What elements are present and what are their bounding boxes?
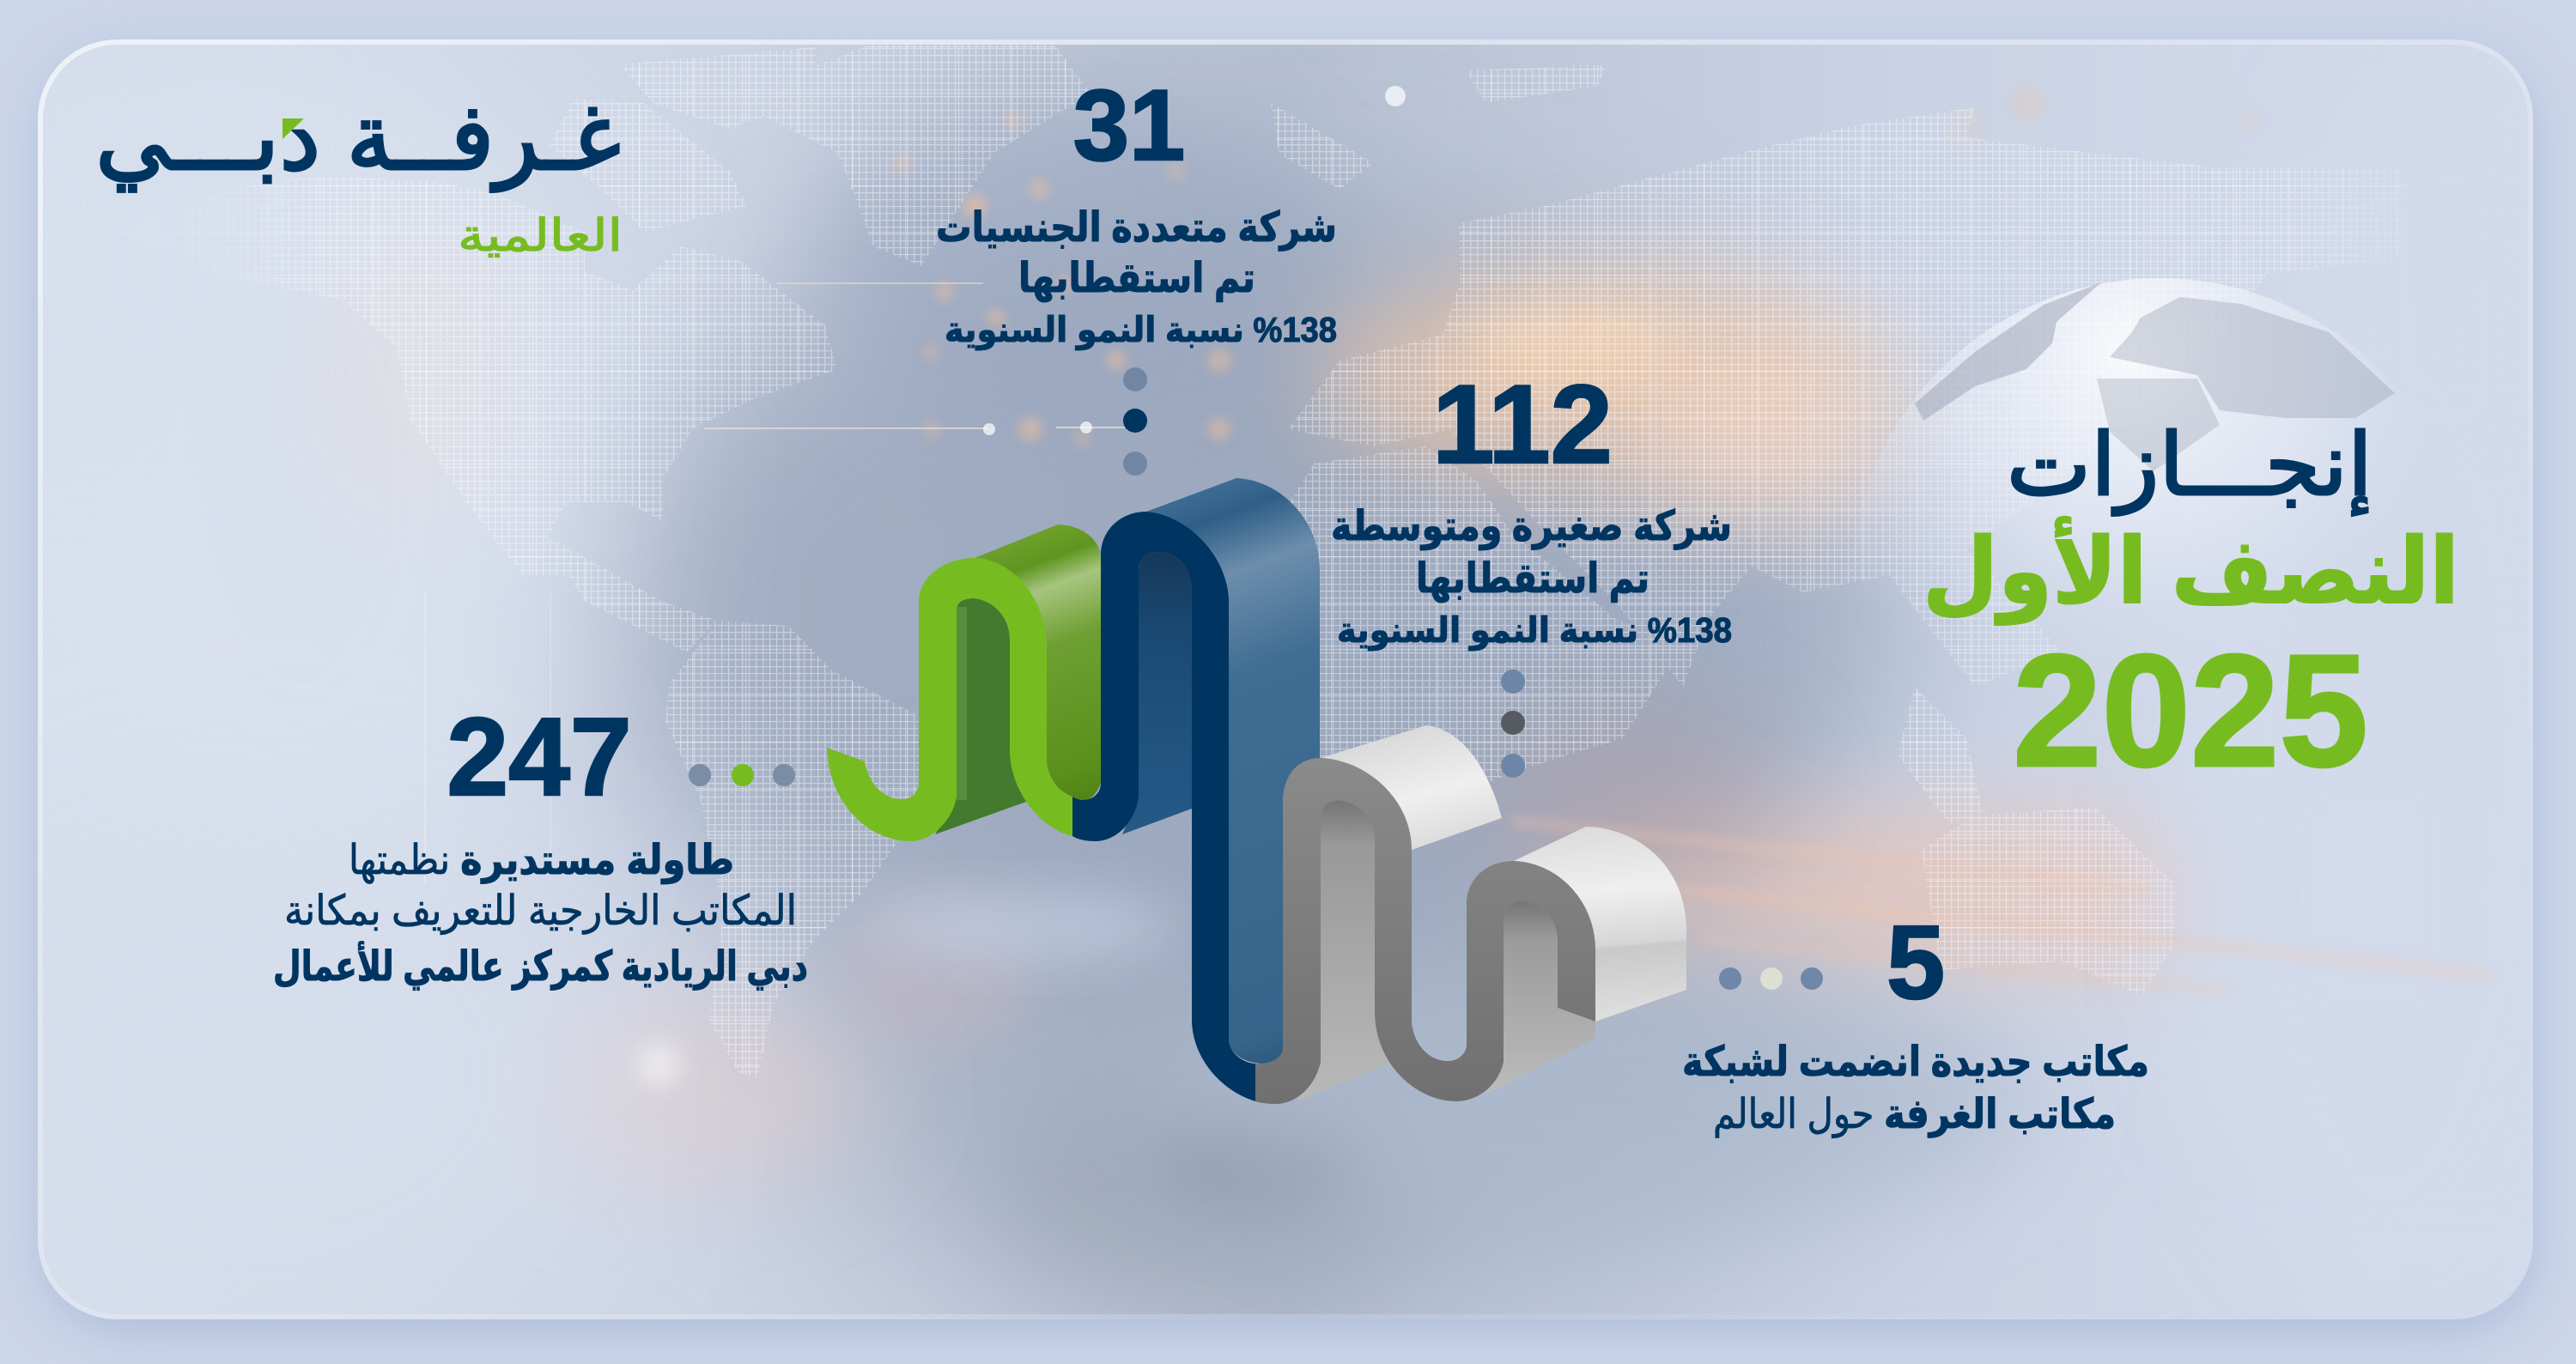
stat: 112 SMEs: تم استقطابها [1416, 556, 1649, 603]
stat: 247 round tables: المكاتب الخارجية للتعريف بمكانة [284, 888, 797, 935]
stat: 247 round tables [273, 695, 808, 991]
title [1923, 417, 2459, 800]
3D ribbon chart [827, 478, 1686, 1104]
dots connector: 112 [1501, 670, 1525, 778]
stat: 31 multinational companies: شركة متعددة الجنسيات [936, 205, 1337, 252]
title: النصف الأول [1923, 516, 2459, 626]
stat: 5 new offices: مكاتب الغرفة حول العالم [1713, 1092, 2116, 1138]
blue ribbon segment [1072, 478, 1320, 1101]
stat: 5 new offices: 5 [1886, 904, 1945, 1021]
stat: 31 multinational companies [936, 69, 1337, 350]
stat: 31 multinational companies: تم استقطابها [1018, 256, 1255, 302]
bokeh city lights [892, 86, 2262, 446]
world map mesh continents [234, 45, 2404, 1078]
title: 2025 [2013, 622, 2368, 800]
title: إنجـــازات [2007, 417, 2372, 516]
stat: 5 new offices [1682, 904, 2149, 1138]
globe [1850, 278, 2469, 896]
stat: 247 round tables: 247 [447, 695, 632, 819]
dots connector: 5 [1719, 967, 1823, 990]
logo: Dubai Chamber: غـرفــة دبـــي [95, 85, 621, 192]
logo green accent [283, 118, 304, 139]
streak lights [1511, 815, 2490, 994]
background glows and blurred city [309, 57, 2190, 1319]
stat: 112 SMEs: 138‏% نسبة النمو السنوية [1337, 610, 1732, 651]
green ribbon segment [827, 524, 1101, 841]
light lines [424, 86, 1406, 1085]
stat: 247 round tables: دبي الريادية كمركز عالمي للأعمال [273, 941, 808, 991]
stat: 31 multinational companies: 138‏% نسبة النمو السنوية [945, 310, 1337, 350]
gray ribbon segment [1255, 725, 1686, 1104]
logo subtitle: العالمية [458, 211, 623, 261]
stat: 112 SMEs: 112 [1432, 361, 1613, 487]
dots connector: 31 [1123, 367, 1147, 476]
stat: 112 SMEs [1331, 361, 1732, 651]
stat: 31 multinational companies: 31 [1073, 69, 1185, 181]
stat: 112 SMEs: شركة صغيرة ومتوسطة [1331, 504, 1732, 550]
stat: 247 round tables: طاولة مستديرة نظمتها [349, 838, 734, 884]
dots connector: 247 [689, 764, 795, 786]
stat: 5 new offices: مكاتب جديدة انضمت لشبكة [1682, 1040, 2149, 1085]
fade of map edges [17, 86, 2576, 1116]
